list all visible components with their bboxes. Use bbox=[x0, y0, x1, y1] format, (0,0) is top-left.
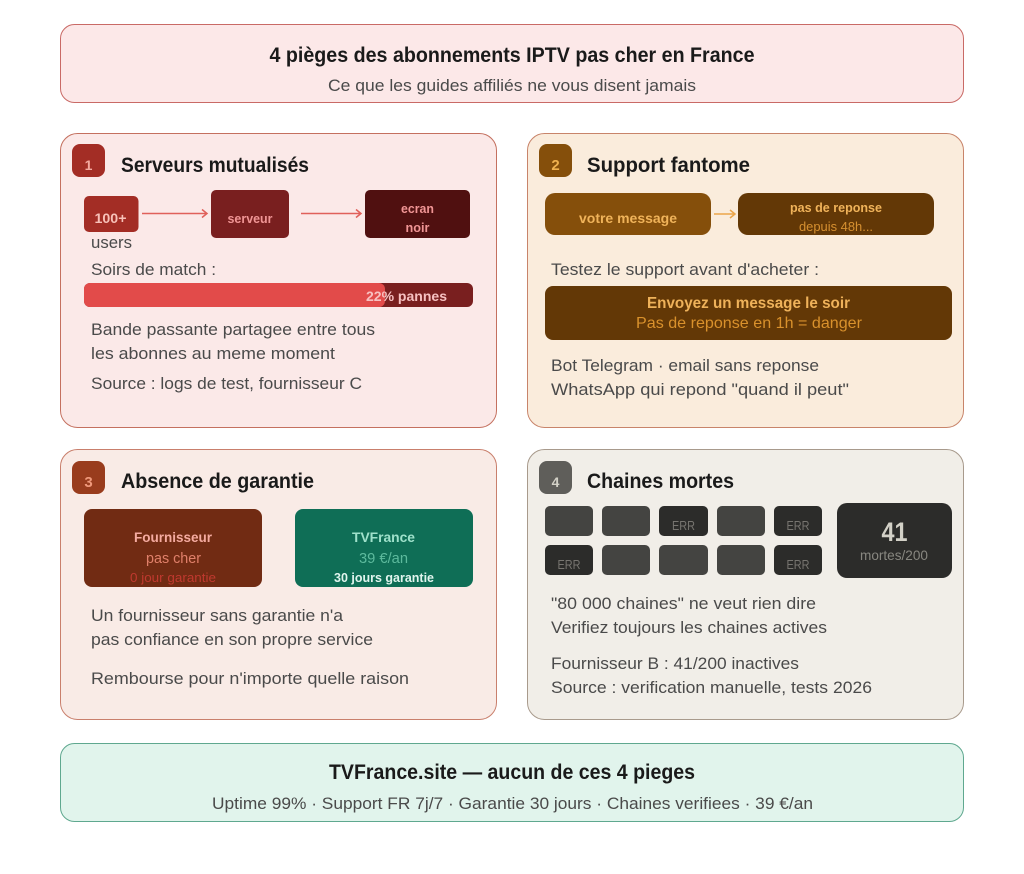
channel tile grid: ERR bbox=[786, 557, 810, 572]
description 1: Source : logs de test, fournisseur C bbox=[91, 374, 362, 393]
description 3: Un fournisseur sans garantie n'a bbox=[91, 606, 344, 625]
description 4: Source : verification manuelle, tests 2026 bbox=[551, 678, 872, 697]
description 3: pas confiance en son propre service bbox=[91, 630, 373, 649]
description 2 bbox=[551, 356, 849, 399]
flow diagram: users to black screen: ecran bbox=[401, 201, 434, 216]
description 2: WhatsApp qui repond "quand il peut" bbox=[551, 380, 849, 399]
panel: serveurs mutualises bbox=[60, 134, 496, 428]
panel: support fantome bbox=[528, 134, 964, 428]
icon: number badge 1: 1 bbox=[85, 157, 93, 173]
icon: number badge 2: 2 bbox=[551, 157, 560, 174]
description 1 bbox=[91, 320, 375, 393]
footer banner bbox=[60, 744, 964, 822]
flow diagram: message without reply bbox=[545, 193, 934, 235]
label: soirs de match: Soirs de match : bbox=[91, 260, 216, 279]
heading 4: Chaines mortes bbox=[587, 470, 734, 493]
title: 4 pièges des abonnements IPTV pas cher en France bbox=[270, 44, 754, 67]
description 3: Rembourse pour n'importe quelle raison bbox=[91, 669, 409, 688]
channel tile grid: ERR bbox=[672, 518, 695, 533]
description 1: les abonnes au meme moment bbox=[91, 344, 335, 363]
comparison card: fournisseur bbox=[84, 509, 262, 587]
callout: envoyez un message bbox=[545, 286, 952, 340]
subtitle: Ce que les guides affiliés ne vous disent jamais bbox=[328, 76, 696, 95]
description 1: Bande passante partagee entre tous bbox=[91, 320, 375, 339]
comparison card: tvfrance: TVFrance bbox=[352, 529, 415, 545]
header banner bbox=[60, 24, 964, 102]
comparison card: tvfrance: 39 €/an bbox=[359, 550, 408, 567]
flow diagram: message without reply: depuis 48h... bbox=[799, 219, 873, 234]
comparison card: tvfrance bbox=[295, 509, 473, 587]
footer details: Uptime 99% · Support FR 7j/7 · Garantie 30 jours · Chaines verifiees · 39 €/an bbox=[212, 794, 813, 813]
progress bar: 22% pannes: 22% pannes bbox=[366, 288, 447, 304]
heading 3: Absence de garantie bbox=[121, 470, 314, 493]
description 4: "80 000 chaines" ne veut rien dire bbox=[551, 594, 816, 613]
footer heading: TVFrance.site — aucun de ces 4 pieges bbox=[329, 761, 695, 784]
icon: number badge 4 bbox=[539, 461, 572, 494]
channel tile grid: ERR bbox=[786, 518, 810, 533]
icon: number badge 3: 3 bbox=[84, 474, 93, 491]
heading 2: Support fantome bbox=[587, 154, 750, 177]
stat: 41 mortes sur 200 bbox=[837, 503, 952, 578]
comparison card: fournisseur: 0 jour garantie bbox=[130, 570, 216, 585]
icon: number badge 2 bbox=[539, 144, 572, 177]
stat: 41 mortes sur 200: mortes/200 bbox=[860, 547, 928, 563]
heading 1: Serveurs mutualisés bbox=[121, 154, 309, 177]
flow diagram: users to black screen: noir bbox=[406, 220, 430, 235]
label: users: users bbox=[91, 233, 132, 252]
comparison card: fournisseur: Fournisseur bbox=[134, 529, 213, 545]
description 4: Fournisseur B : 41/200 inactives bbox=[551, 654, 799, 673]
panel: chaines mortes bbox=[528, 450, 964, 720]
description 4: Verifiez toujours les chaines actives bbox=[551, 618, 827, 637]
stat: 41 mortes sur 200: 41 bbox=[882, 517, 908, 547]
label: testez le support: Testez le support avant d'acheter : bbox=[551, 260, 819, 279]
icon: number badge 1 bbox=[72, 144, 105, 177]
flow diagram: message without reply: votre message bbox=[579, 210, 677, 226]
flow diagram: message without reply: pas de reponse bbox=[790, 200, 882, 215]
panel: absence de garantie bbox=[60, 450, 496, 720]
icon: number badge 3 bbox=[72, 461, 105, 494]
flow diagram: users to black screen bbox=[84, 190, 470, 238]
channel tile grid bbox=[545, 506, 822, 575]
flow diagram: users to black screen: serveur bbox=[228, 211, 272, 226]
icon: number badge 4: 4 bbox=[552, 474, 560, 490]
channel tile grid: ERR bbox=[558, 557, 580, 572]
callout: envoyez un message: Pas de reponse en 1h = danger bbox=[636, 315, 863, 332]
comparison card: tvfrance: 30 jours garantie bbox=[334, 570, 434, 585]
description 3 bbox=[91, 606, 409, 688]
callout: envoyez un message: Envoyez un message le soir bbox=[647, 295, 850, 312]
progress bar: 22% pannes bbox=[84, 283, 473, 307]
flow diagram: users to black screen: 100+ bbox=[94, 210, 126, 226]
description 2: Bot Telegram · email sans reponse bbox=[551, 356, 819, 375]
description 4 bbox=[551, 594, 872, 697]
comparison card: fournisseur: pas cher bbox=[146, 550, 201, 567]
